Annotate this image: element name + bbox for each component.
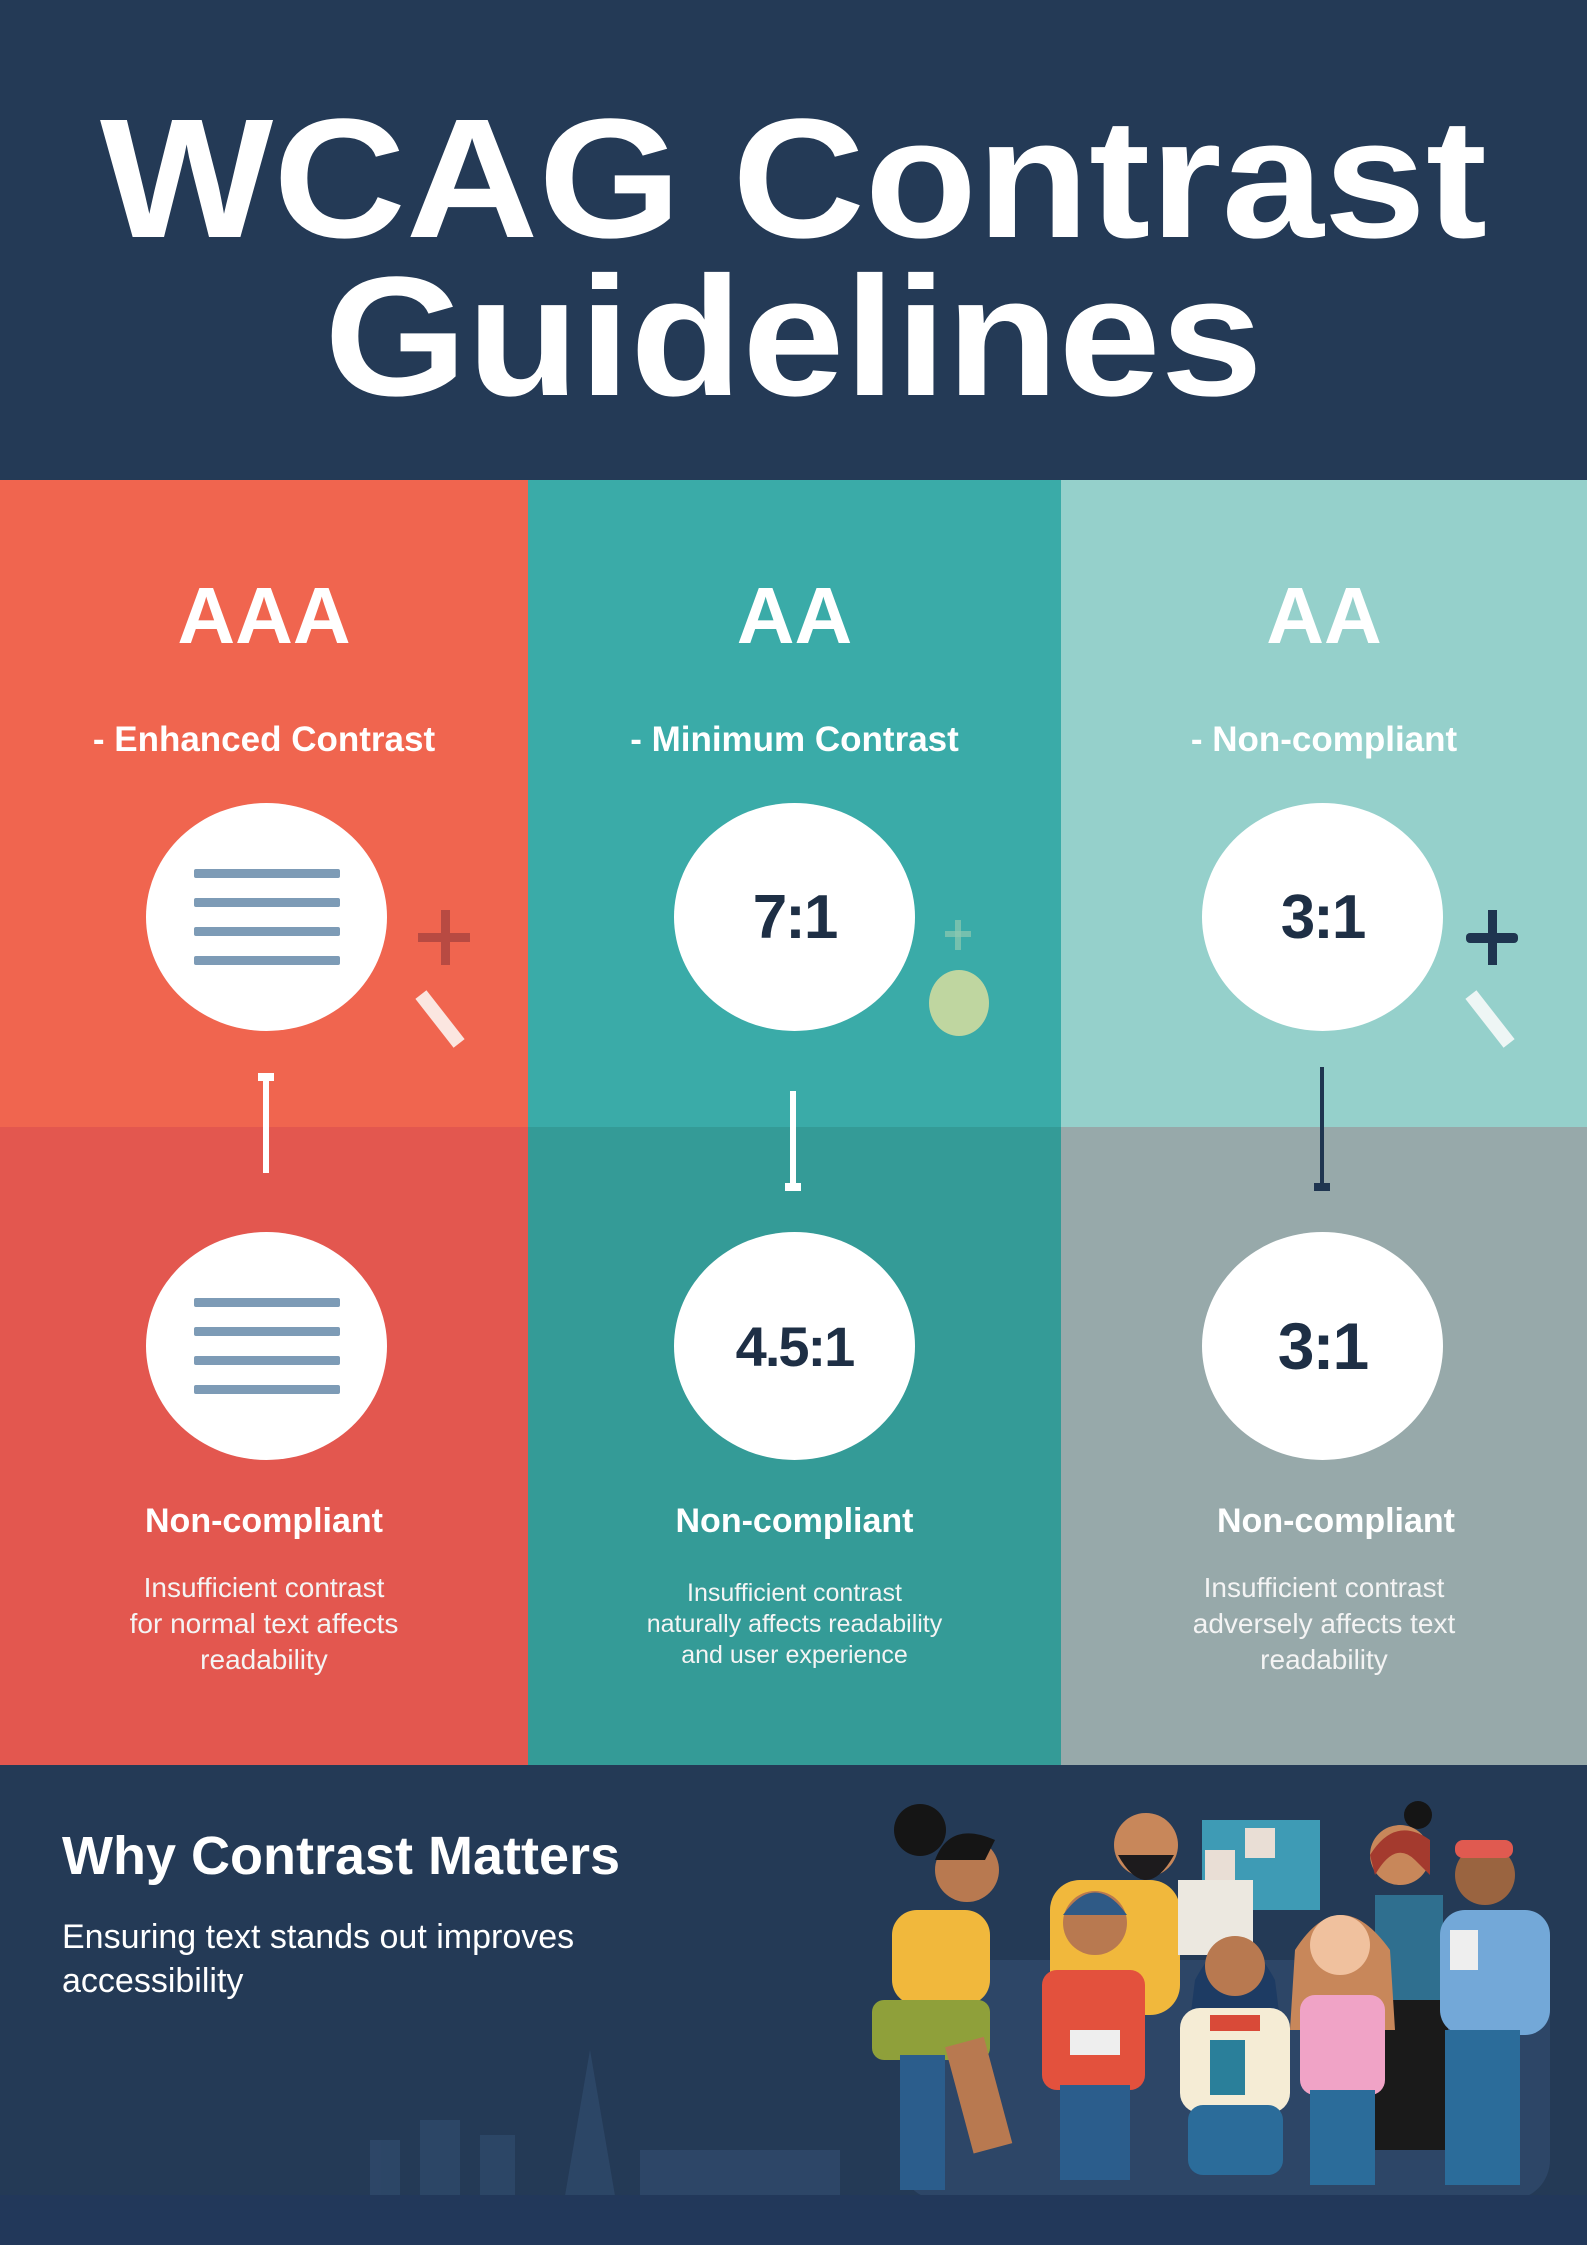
icon: magnifier plus bbox=[416, 910, 470, 1048]
description: naturally affects readability bbox=[647, 1610, 942, 1638]
label: Non-compliant bbox=[1217, 1502, 1455, 1540]
boy red shirt bbox=[1042, 1891, 1145, 2180]
arrow connector bbox=[785, 1091, 801, 1191]
bearded man bbox=[1050, 1813, 1253, 2015]
heading: why contrast matters: Why Contrast Matters bbox=[62, 1826, 620, 1886]
text block: accessibility bbox=[62, 1962, 243, 2000]
ratio circle 4.5:1: 4.5:1 bbox=[736, 1314, 853, 1378]
description: readability bbox=[200, 1644, 328, 1675]
icon: lower circle with text lines bbox=[146, 1232, 387, 1460]
monitor bbox=[1202, 1820, 1320, 1910]
label: Non-compliant bbox=[145, 1502, 383, 1540]
panel: AA non-compliant bbox=[1061, 480, 1587, 1765]
subheading: - Non-compliant bbox=[1191, 720, 1457, 759]
girl center cream bbox=[1180, 1936, 1290, 2175]
icon: magnifier plus dark bbox=[1466, 910, 1518, 1048]
title: WCAG Contrast bbox=[100, 84, 1487, 274]
subheading: - Enhanced Contrast bbox=[93, 720, 435, 759]
subheading: - Minimum Contrast bbox=[630, 720, 959, 759]
description: Insufficient contrast bbox=[1204, 1572, 1444, 1603]
ratio circle 3:1 lower bbox=[1202, 1232, 1443, 1460]
ratio circle 3:1: 3:1 bbox=[1281, 882, 1364, 952]
heading: AAA: AAA bbox=[177, 571, 351, 660]
panel: AAA enhanced contrast bbox=[0, 480, 528, 1765]
ratio circle 7:1: 7:1 bbox=[753, 882, 836, 952]
description bbox=[130, 1572, 398, 1675]
heading: AA: AA bbox=[1266, 571, 1382, 660]
ratio circle 3:1 lower: 3:1 bbox=[1278, 1309, 1367, 1383]
icon: circle with text lines bbox=[146, 803, 387, 1031]
background silhouettes bbox=[370, 1960, 1550, 2225]
description: adversely affects text bbox=[1193, 1608, 1455, 1639]
arrow connector bbox=[258, 1073, 274, 1173]
text block: Ensuring text stands out improves bbox=[62, 1918, 574, 1956]
heading: AA: AA bbox=[737, 571, 852, 660]
ratio circle 7:1 bbox=[674, 803, 915, 1031]
description bbox=[1193, 1572, 1456, 1675]
description bbox=[647, 1579, 942, 1669]
arrow connector bbox=[1314, 1067, 1330, 1191]
icon: faded magnifier bbox=[929, 920, 989, 1036]
man right blue bbox=[1440, 1840, 1550, 2185]
girl pink bbox=[1290, 1915, 1395, 2185]
description: and user experience bbox=[681, 1641, 908, 1669]
ratio circle 3:1 bbox=[1202, 803, 1443, 1031]
illustration: group of people bbox=[370, 1801, 1550, 2195]
ratio circle 4.5:1 bbox=[674, 1232, 915, 1460]
panel: AA minimum contrast bbox=[528, 480, 1061, 1765]
description: Insufficient contrast bbox=[144, 1572, 384, 1603]
label: Non-compliant bbox=[676, 1502, 913, 1540]
woman red hair black dress bbox=[1370, 1801, 1448, 2150]
description: for normal text affects bbox=[130, 1608, 398, 1639]
text block bbox=[62, 1918, 574, 2000]
woman yellow bbox=[872, 1804, 1012, 2190]
title bbox=[100, 84, 1487, 432]
description: readability bbox=[1260, 1644, 1388, 1675]
title: Guidelines bbox=[324, 242, 1263, 432]
description: Insufficient contrast bbox=[687, 1579, 902, 1607]
